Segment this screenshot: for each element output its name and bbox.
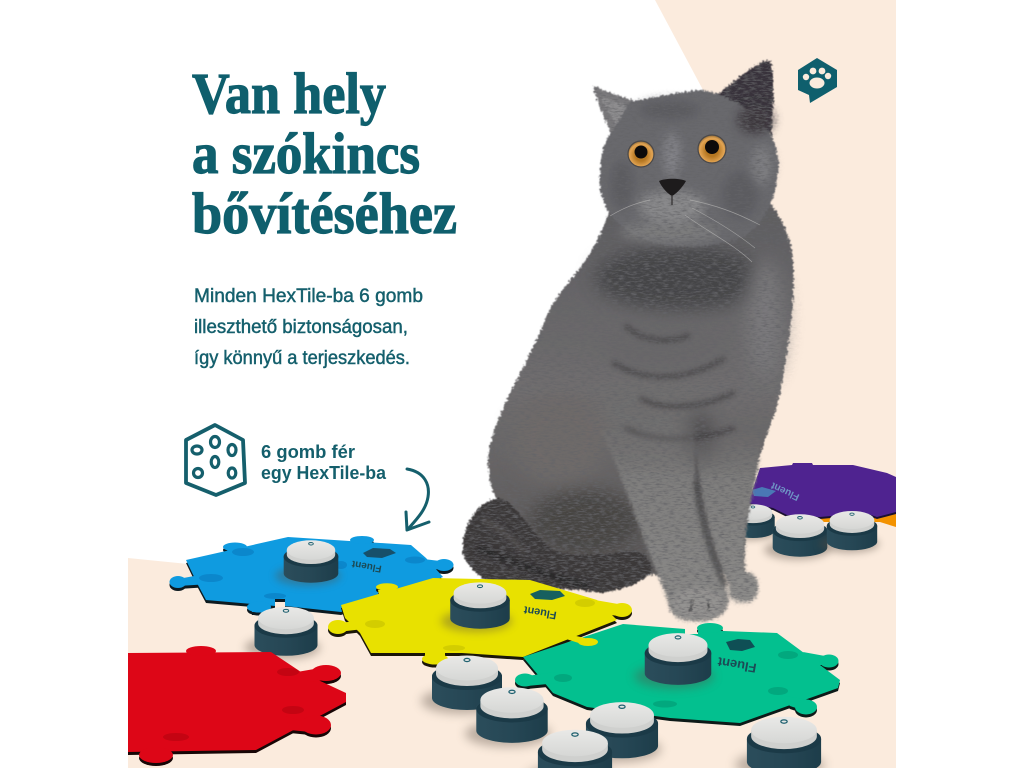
background panel — [128, 0, 896, 768]
blue tile logo: Fluent — [350, 558, 383, 574]
cat tail — [463, 498, 652, 593]
button on yellow tile — [441, 582, 512, 632]
blue tile — [170, 536, 454, 616]
title: bővítéséhez — [192, 181, 457, 246]
floor buttons — [421, 656, 824, 768]
green tile — [515, 623, 840, 726]
logo icon: paw in speech hexagon — [798, 58, 837, 103]
red tile — [128, 646, 346, 766]
button on blue tile — [275, 540, 341, 586]
cat left ear — [593, 86, 640, 140]
icon caption — [261, 441, 387, 483]
cat eyes — [628, 135, 726, 167]
description text: illeszthető biztonságosan, — [194, 317, 408, 338]
description text: így könnyű a terjeszkedés. — [194, 348, 410, 369]
cat — [463, 60, 793, 621]
cat tail shading — [478, 520, 590, 586]
buttons near purple tile — [724, 504, 879, 560]
button on green tile — [634, 633, 714, 689]
infographic canvas — [128, 0, 896, 768]
cat fur shading — [512, 246, 783, 554]
arrow pointing to blue tile — [406, 469, 429, 530]
blue tile logo — [350, 548, 396, 574]
purple and orange tiles (background right): Fluent — [769, 479, 801, 502]
title: Van hely — [192, 61, 386, 126]
description text: Minden HexTile-ba 6 gomb — [194, 286, 423, 307]
yellow tile — [328, 578, 632, 668]
yellow tile logo: Fluent — [523, 603, 558, 621]
description text — [194, 286, 423, 369]
yellow tile logo — [523, 590, 565, 621]
cat front legs — [600, 420, 762, 621]
title — [192, 61, 457, 246]
purple and orange tiles (background right) — [748, 463, 896, 527]
green tile logo: Fluent — [716, 654, 758, 676]
cat head shading — [610, 101, 773, 243]
yellow tab over green tile — [555, 632, 598, 646]
title: a szókincs — [192, 121, 420, 186]
icon caption: 6 gomb fér — [261, 441, 355, 462]
green tile logo — [716, 639, 758, 676]
floor button beside blue tile — [245, 607, 320, 659]
cat body stripes — [612, 325, 735, 439]
icon: hexagon with six buttons — [186, 425, 245, 495]
cat head — [600, 90, 778, 247]
cat body — [488, 205, 793, 575]
icon caption: egy HexTile-ba — [261, 462, 387, 483]
cat whiskers — [610, 200, 760, 262]
cat nose and mouth — [659, 179, 686, 205]
cat right ear — [715, 60, 773, 140]
